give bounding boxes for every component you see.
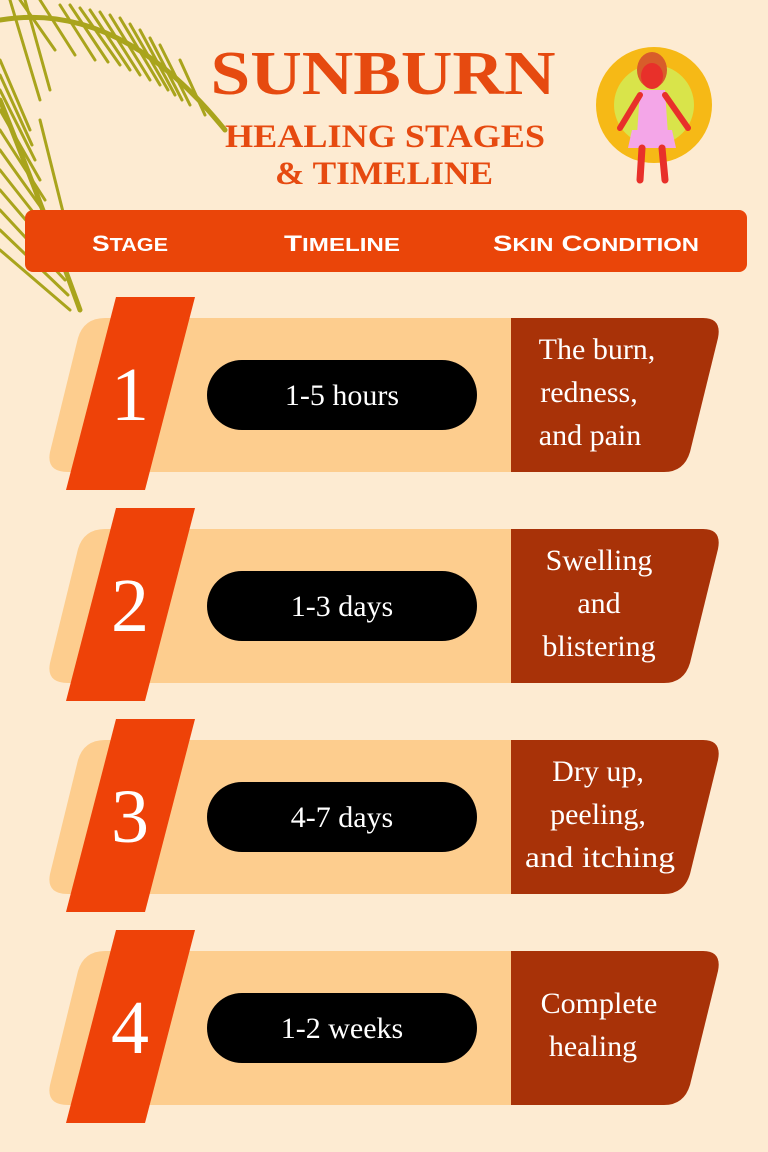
stage 2: 2 <box>111 564 149 648</box>
stage 3: and itching <box>525 841 675 874</box>
stage 2: 1-3 days <box>291 590 393 623</box>
stage 3 <box>49 719 719 912</box>
header bar: T IMELINE <box>284 231 400 256</box>
stage 1: redness, <box>540 376 638 409</box>
stage 3: 3 <box>111 775 149 859</box>
title: HEALING STAGES <box>225 119 545 155</box>
stage 3: 4-7 days <box>291 801 393 834</box>
stage 1: The burn, <box>539 333 655 366</box>
icon: sunburned figure <box>596 47 712 180</box>
header bar <box>25 210 747 272</box>
stage 2: blistering <box>542 630 656 663</box>
stage 2: Swelling <box>546 544 652 577</box>
header bar: STAGE <box>92 231 168 256</box>
stage 1: and pain <box>539 419 641 452</box>
title <box>210 40 556 192</box>
stage 4: 1-2 weeks <box>281 1012 403 1045</box>
stage 4: healing <box>549 1030 637 1063</box>
stage 1 <box>49 297 719 490</box>
stage 4 <box>49 930 719 1123</box>
title: SUNBURN <box>210 40 556 108</box>
stage 4: 4 <box>111 986 149 1070</box>
stage 3: Dry up, <box>552 755 644 788</box>
stage 3: peeling, <box>550 798 646 831</box>
stage 1: 1 <box>111 353 149 437</box>
stage 4: Complete <box>541 987 657 1020</box>
stage 1: 1-5 hours <box>285 379 399 412</box>
stage 2 <box>49 508 719 701</box>
stage 2: and <box>577 587 621 620</box>
header bar: S KIN C ONDITION <box>493 231 699 256</box>
title: & TIMELINE <box>275 156 493 192</box>
icon: palm leaves <box>0 0 225 310</box>
